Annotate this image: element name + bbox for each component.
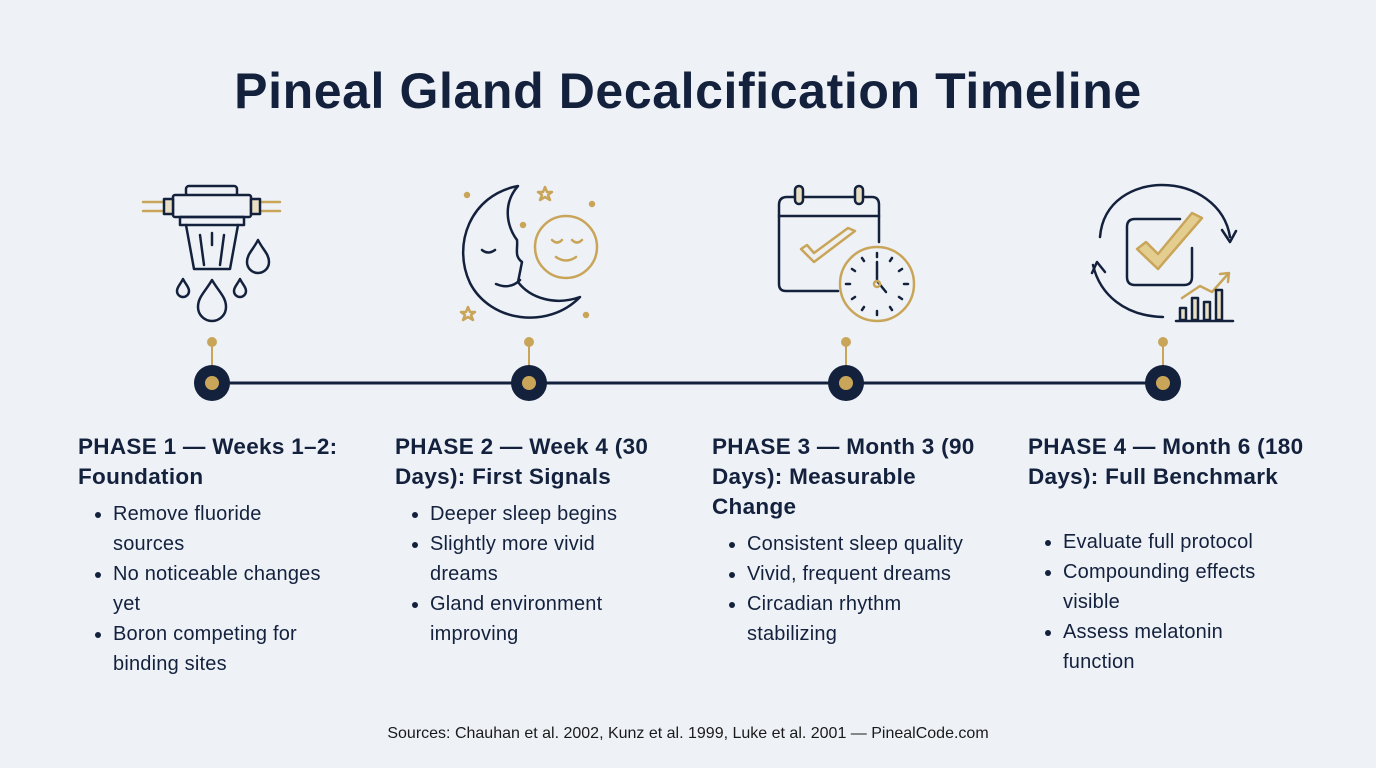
panel: phase 1: Boron competing for binding sites — [113, 623, 297, 675]
panel: phase 1: No noticeable changes yet — [113, 563, 321, 615]
node 4 — [1145, 337, 1181, 401]
timeline line — [212, 382, 1163, 384]
panel: phase 2: Slightly more vivid dreams — [430, 533, 595, 585]
panel: phase 3 — [712, 434, 975, 645]
panel: phase 2: Deeper sleep begins — [430, 503, 617, 525]
panel: phase 4: PHASE 4 — Month 6 (180 Days): Full Benchmark — [1028, 434, 1303, 489]
panel: phase 2 — [395, 434, 648, 645]
panel: phase 3: Consistent sleep quality — [747, 533, 963, 555]
icon: water filter — [143, 186, 280, 321]
sources: Sources: Chauhan et al. 2002, Kunz et al. 1999, Luke et al. 2001 — PinealCode.com — [387, 725, 989, 742]
panel: phase 1: Remove fluoride sources — [113, 503, 262, 555]
title: Pineal Gland Decalcification Timeline — [234, 63, 1142, 119]
panel: phase 4: Evaluate full protocol — [1063, 531, 1253, 553]
panel: phase 4 — [1028, 434, 1303, 673]
icon: sleeping moon — [461, 186, 597, 320]
panel: phase 4: Compounding effects visible — [1063, 561, 1255, 613]
panel: phase 2: PHASE 2 — Week 4 (30 Days): First Signals — [395, 434, 648, 489]
panel: phase 1 — [78, 434, 337, 675]
panel: phase 2: Gland environment improving — [430, 593, 602, 645]
panel: phase 3: Circadian rhythm stabilizing — [747, 593, 901, 645]
icon: calendar and clock — [779, 186, 914, 321]
node 3 — [828, 337, 864, 401]
panel: phase 3: PHASE 3 — Month 3 (90 Days): Measurable Change — [712, 434, 975, 519]
icon: cycle checkbox chart — [1092, 185, 1236, 321]
panel: phase 1: PHASE 1 — Weeks 1–2: Foundation — [78, 434, 337, 489]
panel: phase 3: Vivid, frequent dreams — [747, 563, 951, 585]
node 1 — [194, 337, 230, 401]
panel: phase 4: Assess melatonin function — [1063, 621, 1223, 673]
node 2 — [511, 337, 547, 401]
